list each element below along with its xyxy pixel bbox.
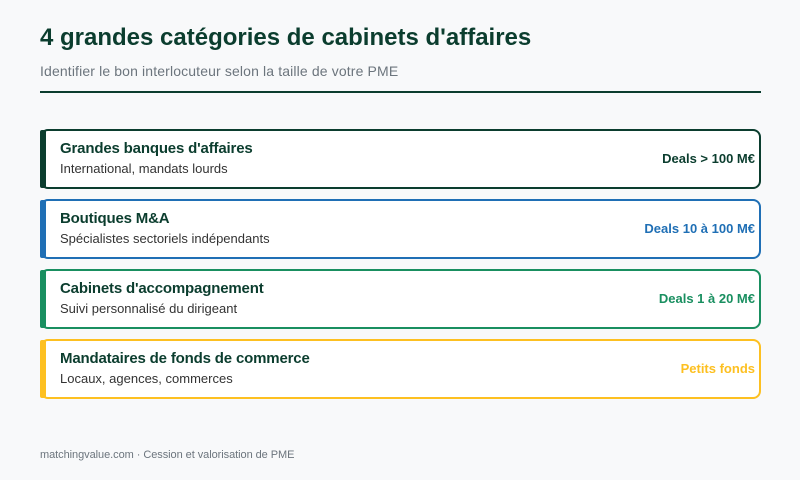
category description: Suivi personnalisé du dirigeant	[60, 301, 237, 316]
category name: Grandes banques d'affaires	[60, 140, 253, 157]
category name: Cabinets d'accompagnement	[60, 280, 264, 297]
category description: Locaux, agences, commerces	[60, 371, 233, 386]
category name: Boutiques M&A	[60, 210, 169, 227]
footer: matchingvalue.com · Cession et valorisation de PME	[40, 449, 294, 461]
subtitle: Identifier le bon interlocuteur selon la taille de votre PME	[40, 63, 398, 79]
deal size: Deals 10 à 100 M€	[644, 221, 755, 236]
deal size: Deals > 100 M€	[662, 151, 755, 166]
category name: Mandataires de fonds de commerce	[60, 350, 310, 367]
panel: mandataires de fonds de commerce	[40, 339, 761, 399]
deal size: Petits fonds	[681, 361, 755, 376]
panel: boutiques M&A	[40, 199, 761, 259]
panel: cabinets d'accompagnement	[40, 269, 761, 329]
deal size: Deals 1 à 20 M€	[659, 291, 755, 306]
category description: International, mandats lourds	[60, 161, 228, 176]
panel: grandes banques d'affaires	[40, 129, 761, 189]
title: 4 grandes catégories de cabinets d'affaires	[40, 24, 531, 51]
category description: Spécialistes sectoriels indépendants	[60, 231, 270, 246]
